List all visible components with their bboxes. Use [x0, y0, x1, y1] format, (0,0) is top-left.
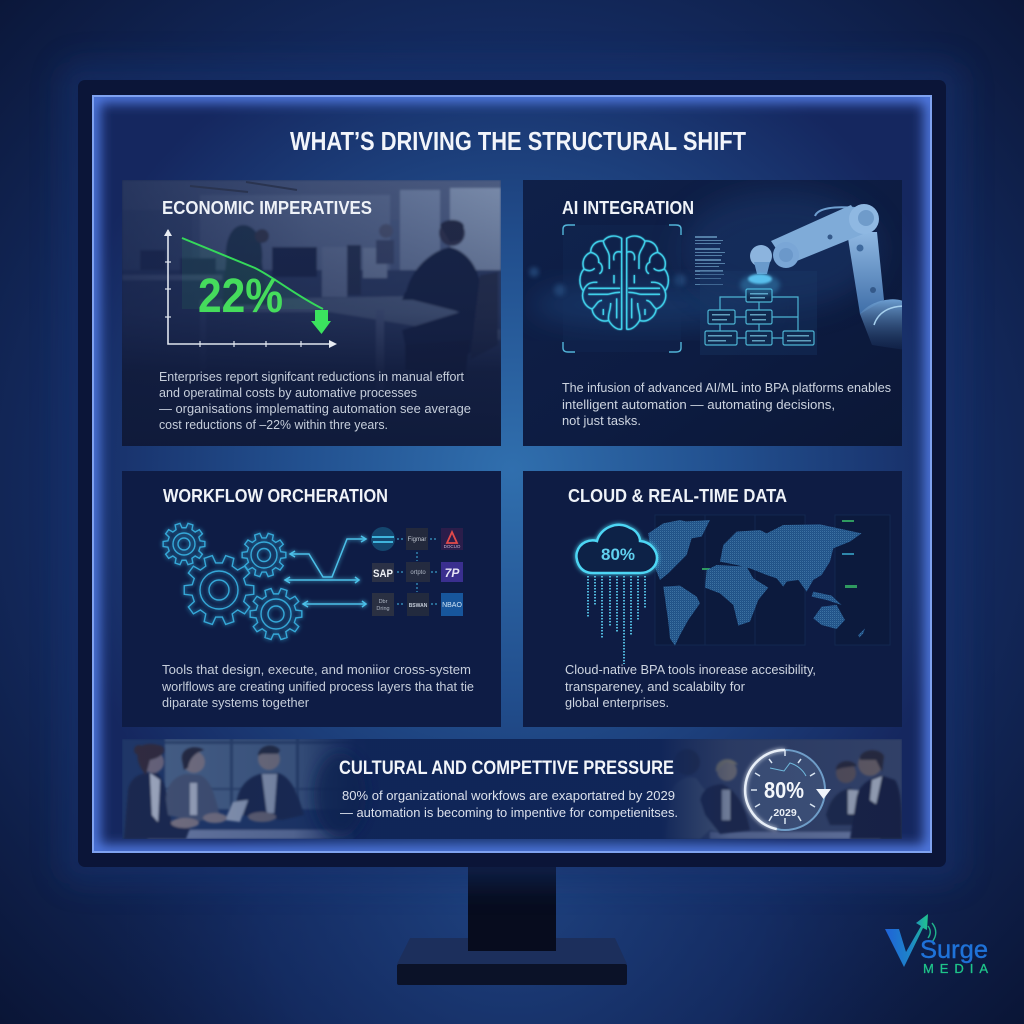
- logo: VSurge Media: MEDIA: [923, 961, 988, 976]
- software logo grid: [371, 527, 463, 616]
- heading: AI INTEGRATION: [562, 198, 694, 218]
- logo: VSurge Media: [885, 914, 988, 976]
- panel: cloud and real-time data: [523, 471, 902, 727]
- body text: cost reductions of –22% within thre years.: [159, 418, 388, 432]
- document snippet: [695, 236, 725, 285]
- gauge: 80% by 2029: 2029: [773, 807, 797, 819]
- body text: [161, 663, 474, 710]
- software logo grid: Dring: [376, 606, 390, 612]
- heading: ECONOMIC IMPERATIVES: [162, 198, 372, 218]
- icon: cloud with 80%: [576, 525, 657, 573]
- body text: global enterprises.: [565, 696, 669, 710]
- body text: [159, 370, 471, 432]
- heading: CLOUD & REAL-TIME DATA: [568, 486, 787, 506]
- gauge: 80% by 2029: [745, 750, 831, 830]
- heading: WORKFLOW ORCHERATION: [163, 486, 388, 506]
- icon: gears: [163, 523, 302, 640]
- world map: [648, 520, 865, 646]
- logo: VSurge Media: Surge: [920, 936, 988, 964]
- body text: Tools that design, execute, and moniior cross-system: [162, 663, 471, 677]
- right meeting participants: [665, 749, 902, 839]
- body text: — automation is becoming to impentive for competienitses.: [340, 805, 678, 820]
- software logo grid: DOCUO: [444, 544, 461, 549]
- title: WHAT’S DRIVING THE STRUCTURAL SHIFT: [290, 126, 746, 156]
- icon: brain in frame: [563, 225, 681, 352]
- panel: cultural and competitive pressure: [122, 739, 902, 839]
- flowchart: [700, 271, 817, 355]
- line chart: cost drop: [164, 229, 337, 348]
- heading: CULTURAL AND COMPETTIVE PRESSURE: [339, 758, 674, 779]
- panel background with server racks: [523, 471, 902, 727]
- body text: transpareney, and scalabilty for: [565, 680, 745, 694]
- body text: [565, 663, 816, 710]
- software logo grid: NBAO: [442, 602, 462, 609]
- gauge: 80% by 2029: 80%: [764, 777, 804, 803]
- software logo grid: Dbr: [379, 599, 388, 605]
- software logo grid: SAP: [373, 568, 393, 580]
- body text: [562, 381, 891, 428]
- stat: 22%: 22%: [198, 270, 283, 323]
- connector arrows: [285, 536, 366, 607]
- body text: — organisations implematting automation see average: [159, 402, 471, 416]
- panel: economic imperatives: [122, 180, 501, 446]
- screen: [92, 95, 932, 853]
- meeting photo backdrop: [122, 739, 902, 839]
- panel background: [122, 471, 501, 727]
- panel: AI integration: [523, 180, 905, 446]
- software logo grid: ortpto: [410, 570, 426, 576]
- office photo backdrop: [122, 180, 501, 446]
- software logo grid: Figmar: [408, 537, 426, 543]
- body text: Cloud-native BPA tools inorease accesibility,: [565, 663, 816, 677]
- software logo grid: BSWAN: [409, 603, 428, 609]
- body text: diparate systems together: [162, 696, 309, 710]
- body text: 80% of organizational workfows are exaportatred by 2029: [342, 788, 675, 803]
- body text: not just tasks.: [562, 414, 641, 428]
- body text: [340, 788, 678, 820]
- software logo grid: 7P: [445, 566, 460, 580]
- monitor stand: [397, 866, 627, 985]
- left meeting participants: [124, 744, 304, 839]
- panel background: [523, 180, 902, 446]
- body text: worlflows are creating unified process layers tha that tie: [161, 680, 474, 694]
- body text: Enterprises report signifcant reductions in manual effort: [159, 370, 465, 384]
- body text: and operatimal costs by automative processes: [159, 386, 417, 400]
- robot arm: [740, 204, 905, 350]
- body text: The infusion of advanced AI/ML into BPA platforms enables: [562, 381, 891, 395]
- panel: workflow orchestration: [122, 471, 501, 727]
- icon: cloud with 80%: 80%: [601, 545, 635, 564]
- body text: intelligent automation — automating decisions,: [562, 398, 835, 412]
- monitor frame: [60, 62, 964, 884]
- data rain: [588, 576, 645, 664]
